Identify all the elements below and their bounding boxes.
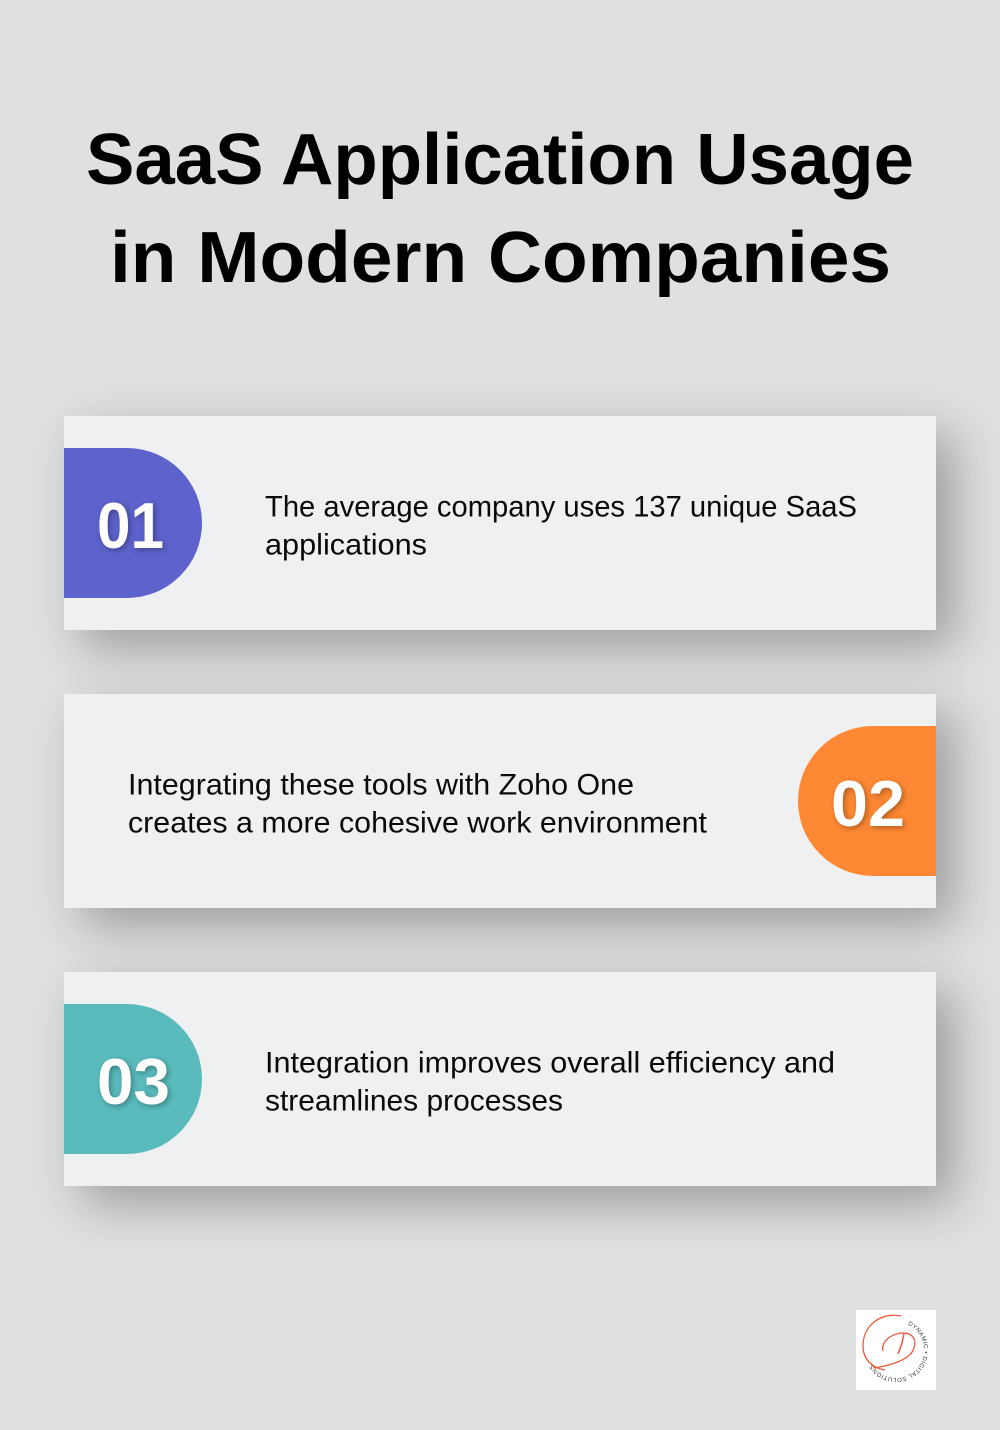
text: step 02: creates a more cohesive work environment: [128, 806, 707, 840]
badge 01: [64, 448, 202, 598]
text: step 03: [265, 1046, 835, 1118]
text: step 01: The average company uses 137 unique SaaS: [265, 490, 857, 524]
badge 01: 01: [97, 489, 164, 562]
badge 03: [64, 1004, 202, 1154]
title: in Modern Companies: [110, 218, 891, 298]
title: SaaS Application Usage: [86, 120, 914, 200]
text: step 01: applications: [265, 528, 427, 562]
icon: logo: DYNAMIC • DIGITAL SOLUTIONS: [870, 1321, 928, 1382]
text: step 01: [265, 490, 857, 562]
title: [86, 120, 914, 298]
badge 02: 02: [831, 767, 905, 840]
text: step 03: streamlines processes: [265, 1084, 563, 1118]
panel: step 02: [64, 694, 936, 908]
text: step 02: [128, 768, 707, 840]
text: step 03: Integration improves overall efficiency and: [265, 1046, 835, 1080]
badge 02: [798, 726, 936, 876]
panel: step 03: [64, 972, 936, 1186]
panel: step 01: [64, 416, 936, 630]
icon: logo: [856, 1310, 936, 1390]
badge 03: 03: [97, 1045, 170, 1118]
text: step 02: Integrating these tools with Zoho One: [128, 768, 634, 802]
